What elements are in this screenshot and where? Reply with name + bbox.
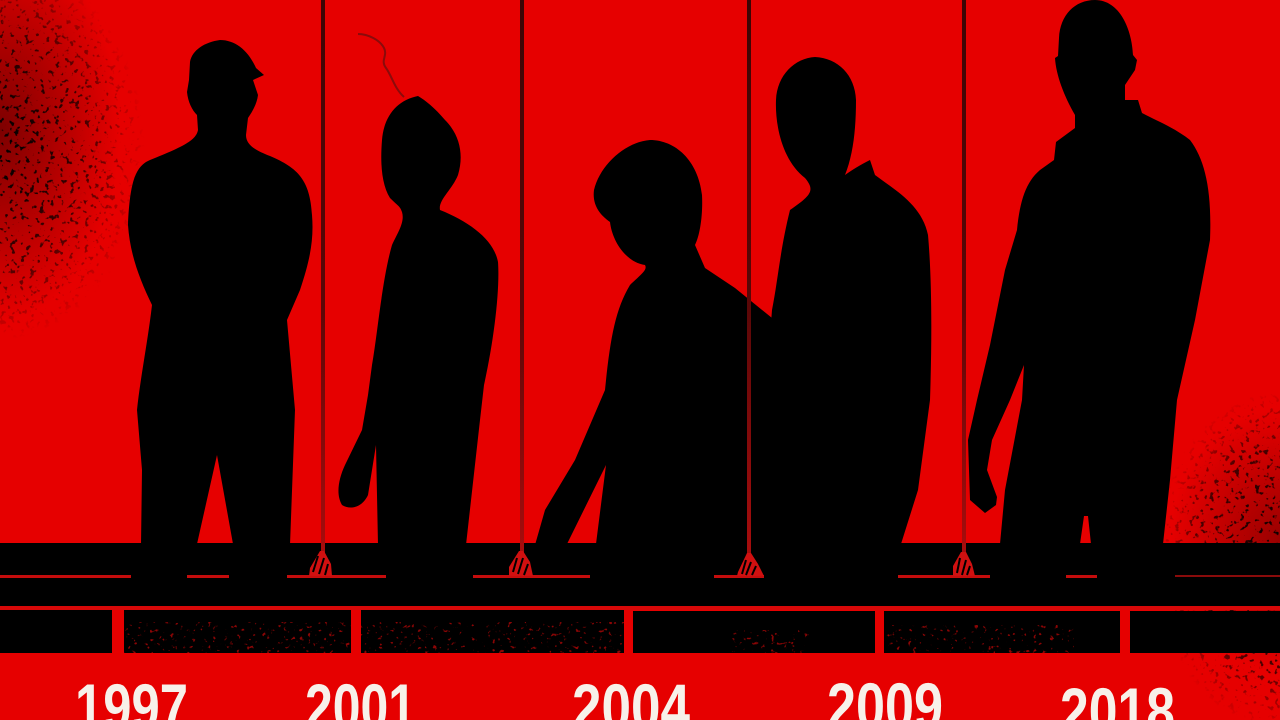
red rule above boxes: [0, 606, 1280, 610]
silhouette: figure 2001: [338, 96, 498, 580]
vertical divider lines: [321, 0, 966, 556]
timeline rail segments: [0, 575, 1280, 578]
dark haze: top-left corner: [0, 0, 200, 350]
flame markers at line bases: [309, 551, 975, 576]
silhouette: figure 2018: [968, 0, 1210, 580]
year labels: [75, 669, 1175, 720]
silhouette: figure 1997: [128, 40, 312, 580]
row of black boxes: [0, 610, 1280, 653]
silhouette: figure 2004: [535, 140, 772, 580]
silhouette: figure 2009: [760, 57, 931, 580]
black timeline band: [0, 543, 1280, 606]
red grunge specks in boxes: [124, 622, 1074, 653]
squiggle above second figure: [358, 34, 404, 97]
dark haze: bottom-right corner: [1130, 400, 1280, 720]
